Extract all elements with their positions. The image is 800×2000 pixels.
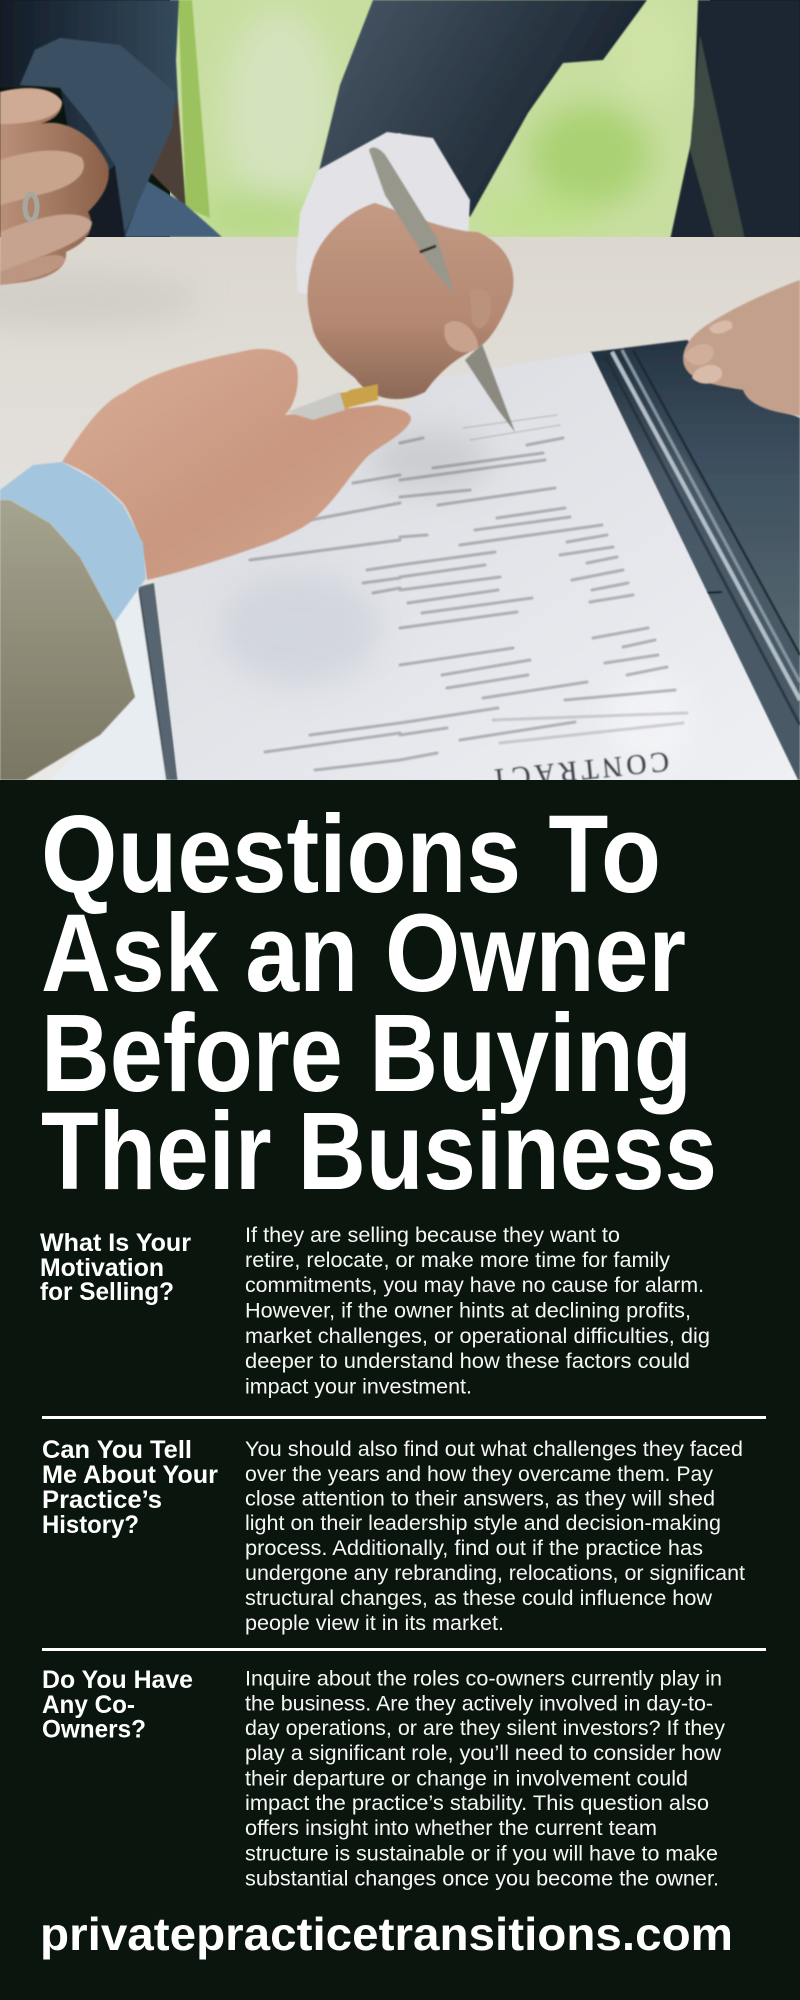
heading: history: Me About Your bbox=[42, 1461, 218, 1489]
shirt cuff bbox=[296, 132, 470, 295]
window with green foliage bbox=[170, 0, 710, 245]
hand: far left clasped hands bbox=[0, 88, 109, 285]
section: co-owners bbox=[42, 1666, 726, 1890]
body text: co-owners: the business. Are they actively involved in day-to- bbox=[245, 1692, 713, 1716]
icon: wedding ring bbox=[25, 194, 37, 220]
heading: co-owners: Owners? bbox=[42, 1716, 146, 1744]
body text: history: You should also find out what challenges they faced bbox=[245, 1438, 743, 1461]
body text: history bbox=[245, 1438, 745, 1635]
paper shadow cast by hand bbox=[220, 430, 695, 770]
section: practice history bbox=[42, 1436, 745, 1635]
body text: motivation: commitments, you may have no cause for alarm. bbox=[245, 1274, 704, 1297]
body text: history: close attention to their answers, as they will shed bbox=[245, 1488, 715, 1510]
sleeve: blue shirt cuff bbox=[0, 462, 146, 622]
heading: motivation: What Is Your bbox=[40, 1229, 191, 1257]
title: Before Buying bbox=[41, 992, 692, 1115]
heading: history: History? bbox=[42, 1511, 139, 1539]
body text: motivation bbox=[245, 1224, 710, 1398]
heading: co-owners: Do You Have bbox=[42, 1666, 193, 1694]
body text: co-owners: structure is sustainable or if you will have to make bbox=[245, 1842, 718, 1866]
pen: silver pen held upright bbox=[369, 148, 515, 432]
hero photo: contract signing across a table bbox=[0, 0, 800, 780]
sleeve: olive jacket bbox=[0, 500, 135, 780]
body text: co-owners bbox=[245, 1668, 726, 1890]
body text: co-owners: their departure or change in involvement could bbox=[245, 1768, 688, 1790]
heading: history: Can You Tell bbox=[42, 1436, 192, 1464]
contract paper bbox=[155, 352, 798, 780]
suit: right person bbox=[670, 0, 800, 240]
section: motivation for selling bbox=[40, 1224, 710, 1398]
suit: left person bbox=[0, 0, 222, 237]
body text: motivation: If they are selling because they want to bbox=[245, 1224, 620, 1247]
body text: history: people view it in its market. bbox=[245, 1612, 504, 1635]
body text: motivation: impact your investment. bbox=[245, 1376, 472, 1398]
footer website url: privatepracticetransitions.com bbox=[40, 1908, 733, 1960]
blurred contract text lines bbox=[250, 415, 687, 770]
table top bbox=[0, 237, 800, 780]
body text: co-owners: substantial changes once you become the owner. bbox=[245, 1868, 719, 1890]
heading: history: Practice’s bbox=[42, 1486, 162, 1514]
body text: motivation: deeper to understand how these factors could bbox=[245, 1350, 690, 1373]
suit sleeve: centre person bbox=[318, 0, 647, 217]
body text: history: over the years and how they overcame them. Pay bbox=[245, 1463, 713, 1486]
body text: history: light on their leadership style and decision-making bbox=[245, 1512, 721, 1535]
right folder with spine lines bbox=[590, 340, 800, 780]
body text: co-owners: play a significant role, you’ll need to consider how bbox=[245, 1742, 722, 1765]
pen: gold and silver pen in hand bbox=[287, 384, 378, 420]
body text: history: structural changes, as these could influence how bbox=[245, 1587, 713, 1610]
dark panel background bbox=[0, 780, 800, 2000]
heading: history bbox=[42, 1436, 218, 1539]
body text: co-owners: Inquire about the roles co-owners currently play in bbox=[245, 1668, 722, 1690]
hand: centre writing hand bbox=[308, 203, 513, 399]
heading: motivation: Motivation bbox=[40, 1254, 164, 1282]
hand: right hand on folder bbox=[683, 280, 800, 416]
heading: motivation bbox=[40, 1229, 191, 1306]
body text: history: undergone any rebranding, relocations, or significant bbox=[245, 1562, 745, 1585]
left folder edge and lower page bbox=[50, 583, 180, 780]
heading: co-owners: Any Co- bbox=[42, 1691, 135, 1719]
heading: motivation: for Selling? bbox=[40, 1278, 174, 1306]
hand: front hand holding pen bbox=[62, 349, 411, 580]
body text: motivation: However, if the owner hints at declining profits, bbox=[245, 1300, 691, 1322]
body text: co-owners: offers insight into whether the current team bbox=[245, 1817, 657, 1840]
body text: motivation: market challenges, or operational difficulties, dig bbox=[245, 1325, 710, 1348]
body text: history: process. Additionally, find out if the practice has bbox=[245, 1537, 703, 1560]
heading: co-owners bbox=[42, 1666, 193, 1744]
title bbox=[41, 793, 717, 1213]
title: Questions To bbox=[41, 793, 661, 916]
table shadow under left hand bbox=[0, 272, 200, 328]
body text: motivation: retire, relocate, or make more time for family bbox=[245, 1249, 671, 1272]
title: Ask an Owner bbox=[41, 892, 686, 1015]
body text: co-owners: impact the practice’s stability. This question also bbox=[245, 1792, 709, 1815]
body text: co-owners: day operations, or are they silent investors? If they bbox=[245, 1717, 726, 1740]
